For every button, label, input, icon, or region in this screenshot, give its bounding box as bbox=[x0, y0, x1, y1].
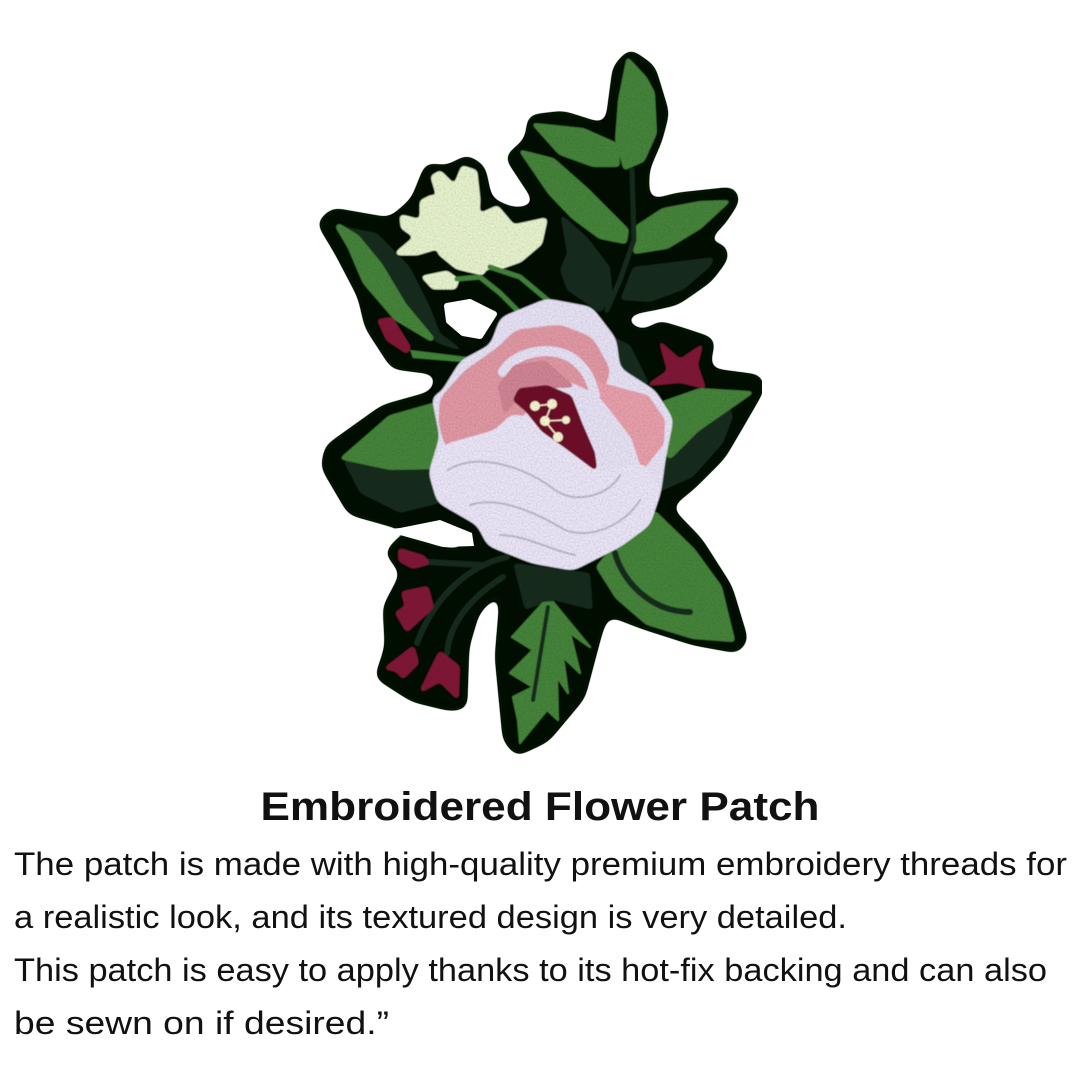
outer white petals bbox=[432, 302, 670, 567]
title: Embroidered Flower Patch bbox=[260, 785, 820, 829]
inner pink bbox=[499, 362, 572, 412]
inner white ring bbox=[503, 351, 595, 395]
stem bbox=[607, 170, 634, 310]
description text: a realistic look, and its textured design is very detailed. bbox=[14, 899, 847, 935]
small bud petal bbox=[423, 272, 458, 288]
lower petal contour stitching bbox=[448, 462, 640, 555]
upper left pink petal bbox=[442, 328, 607, 445]
white notch between left leaf and lower buds bbox=[380, 520, 474, 547]
top leaf bbox=[617, 60, 655, 168]
embroidered flower patch bbox=[319, 51, 762, 754]
left leaf green bbox=[343, 403, 445, 468]
red bud top left bbox=[378, 318, 410, 353]
upper right pink petal bbox=[587, 380, 663, 467]
fern spine bbox=[533, 607, 548, 700]
dark red center bbox=[515, 387, 595, 468]
rose bbox=[432, 302, 670, 567]
right leaf green bbox=[655, 390, 750, 457]
bud stems bbox=[457, 277, 517, 310]
right leaf dark bbox=[650, 407, 733, 493]
left leaf dark bbox=[337, 225, 467, 353]
description text: be sewn on if desired.” bbox=[14, 1005, 389, 1041]
black backing silhouette bbox=[319, 51, 762, 754]
fern leaf bbox=[510, 602, 590, 743]
dark right leaf bbox=[620, 257, 715, 302]
red bud right bbox=[648, 342, 705, 388]
dark center leaf bbox=[560, 213, 613, 313]
left leaf dark bbox=[343, 460, 440, 513]
short green stem bbox=[410, 350, 467, 362]
description text bbox=[14, 846, 1067, 1041]
description text: This patch is easy to apply thanks to its hot-fix backing and can also bbox=[14, 952, 1047, 988]
stamens bbox=[530, 399, 570, 442]
left long leaf bbox=[522, 152, 627, 242]
left leaf green edge bbox=[337, 225, 433, 340]
upper left leaf bbox=[535, 125, 618, 165]
dark leaf behind rose right bbox=[610, 335, 650, 385]
lower left stems bbox=[417, 557, 507, 653]
lower white petal bbox=[433, 417, 658, 567]
description text: The patch is made with high-quality premium embroidery threads for bbox=[14, 846, 1067, 882]
white bud bbox=[398, 168, 545, 273]
white gap between bud and rose bbox=[447, 302, 494, 336]
lower right leaf vein bbox=[615, 553, 690, 612]
red buds lower left bbox=[387, 550, 458, 697]
dark leaf cluster above fern bbox=[513, 563, 593, 610]
right upper leaf bbox=[635, 202, 727, 252]
lower right leaf bbox=[598, 513, 733, 640]
